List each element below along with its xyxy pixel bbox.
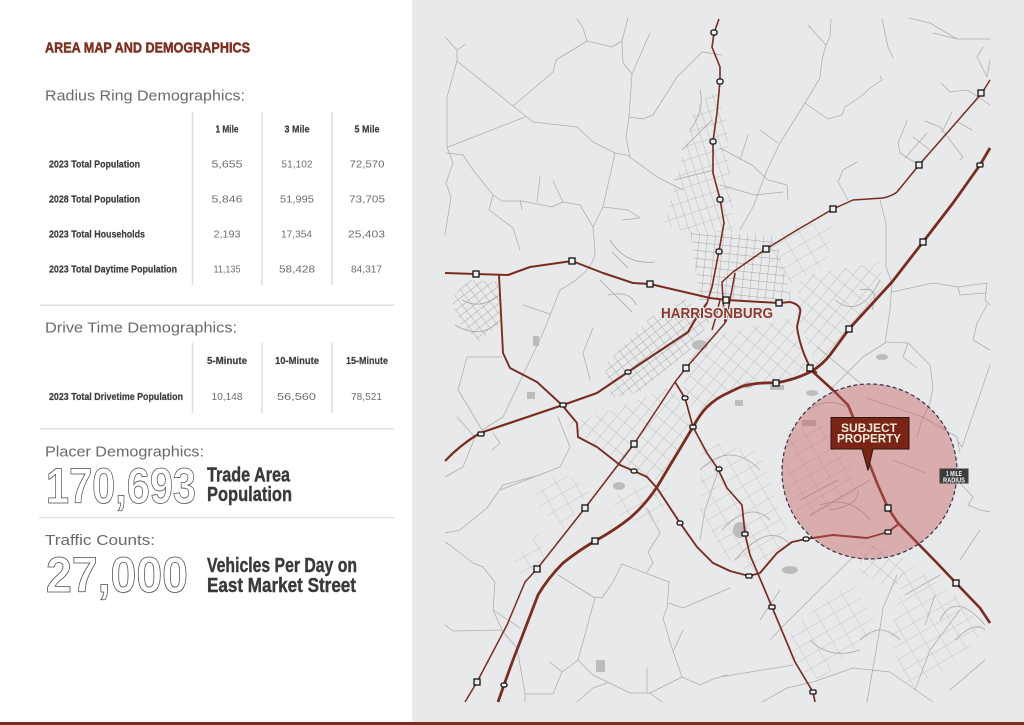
stat: trade area population: Population (207, 484, 292, 506)
table: radius ring demographics: 1 Mile (216, 124, 239, 136)
table: radius ring demographics: 17,354 (281, 228, 312, 240)
road: East Market Street through subject property (812, 371, 990, 623)
table: radius ring demographics: 25,403 (348, 228, 385, 240)
table: radius ring demographics: 58,428 (279, 263, 315, 275)
map of Harrisonburg (445, 18, 990, 702)
table: radius ring demographics: 73,705 (349, 194, 385, 206)
road: southern loop (499, 275, 900, 576)
table: radius ring demographics: 2,193 (214, 228, 241, 240)
curved neighbourhood streets (455, 90, 985, 690)
divider (40, 428, 394, 429)
table: drive time demographics (49, 343, 388, 413)
callout: subject property: SUBJECT (841, 421, 898, 435)
one mile radius circle (782, 384, 957, 559)
heading: radius ring demographics: Radius Ring Demographics: (45, 88, 245, 104)
table: radius ring demographics: 51,995 (280, 194, 314, 206)
heading: placer demographics: Placer Demographics: (45, 443, 204, 460)
building footprints (527, 336, 888, 672)
road: southwest to northeast connector (465, 80, 990, 702)
table: radius ring demographics: 5,846 (212, 194, 243, 206)
label: 1 mile radius: RADIUS (943, 476, 965, 485)
divider (40, 304, 394, 306)
label: 1 mile radius: 1 MILE (946, 469, 962, 478)
heading: traffic counts: Traffic Counts: (45, 532, 155, 549)
stat: trade area population: 170,693 (46, 458, 196, 514)
road: Route 11 north to west (707, 19, 724, 303)
table: radius ring demographics: 11,135 (214, 263, 241, 275)
table: drive time demographics: 10-Minute (275, 355, 319, 367)
table: drive time demographics: 78,521 (351, 391, 382, 403)
town street grids (450, 92, 985, 690)
table: drive time demographics: 2023 Total Drivetime Population (49, 391, 183, 403)
road: Route 33 west (445, 303, 707, 461)
panel: map background (412, 0, 1024, 725)
table: radius ring demographics: 5 Mile (354, 124, 380, 136)
table: radius ring demographics: 5,655 (212, 158, 243, 170)
stat: vehicles per day (46, 547, 357, 603)
stat: vehicles per day: East Market Street (207, 575, 356, 597)
title: AREA MAP AND DEMOGRAPHICS (45, 40, 250, 56)
rural roads (445, 18, 722, 430)
table: radius ring demographics: 2023 Total Population (49, 158, 140, 170)
table: radius ring demographics: 2023 Total Households (49, 228, 145, 240)
road: south connector (675, 382, 815, 702)
footer bar (0, 722, 1024, 725)
heading: drive time demographics: Drive Time Demographics: (45, 320, 237, 337)
table: radius ring demographics (49, 112, 385, 285)
table: drive time demographics: 10,148 (212, 391, 243, 403)
road shield markers (473, 30, 984, 694)
callout: subject property (831, 418, 909, 470)
table: radius ring demographics: 51,102 (282, 158, 313, 170)
stat: vehicles per day: Vehicles Per Day on (207, 555, 357, 577)
city label: Harrisonburg: HARRISONBURG (661, 306, 773, 322)
table: radius ring demographics: 2023 Total Daytime Population (49, 263, 177, 275)
table: drive time demographics: 56,560 (277, 391, 316, 403)
table: drive time demographics: 15-Minute (346, 355, 388, 367)
stat: trade area population: Trade Area (207, 465, 291, 487)
table: radius ring demographics: 2028 Total Population (49, 194, 140, 206)
callout: subject property: PROPERTY (837, 432, 901, 446)
table: drive time demographics: 5-Minute (207, 355, 247, 367)
label: 1 mile radius (940, 468, 968, 485)
table: radius ring demographics: 84,317 (351, 263, 382, 275)
divider (39, 517, 394, 518)
table: radius ring demographics: 72,570 (350, 158, 385, 170)
highway: Interstate 81 (498, 148, 990, 702)
road: East Market Street (445, 261, 817, 373)
table: radius ring demographics: 3 Mile (284, 124, 310, 136)
stat: vehicles per day: 27,000 (46, 547, 188, 603)
